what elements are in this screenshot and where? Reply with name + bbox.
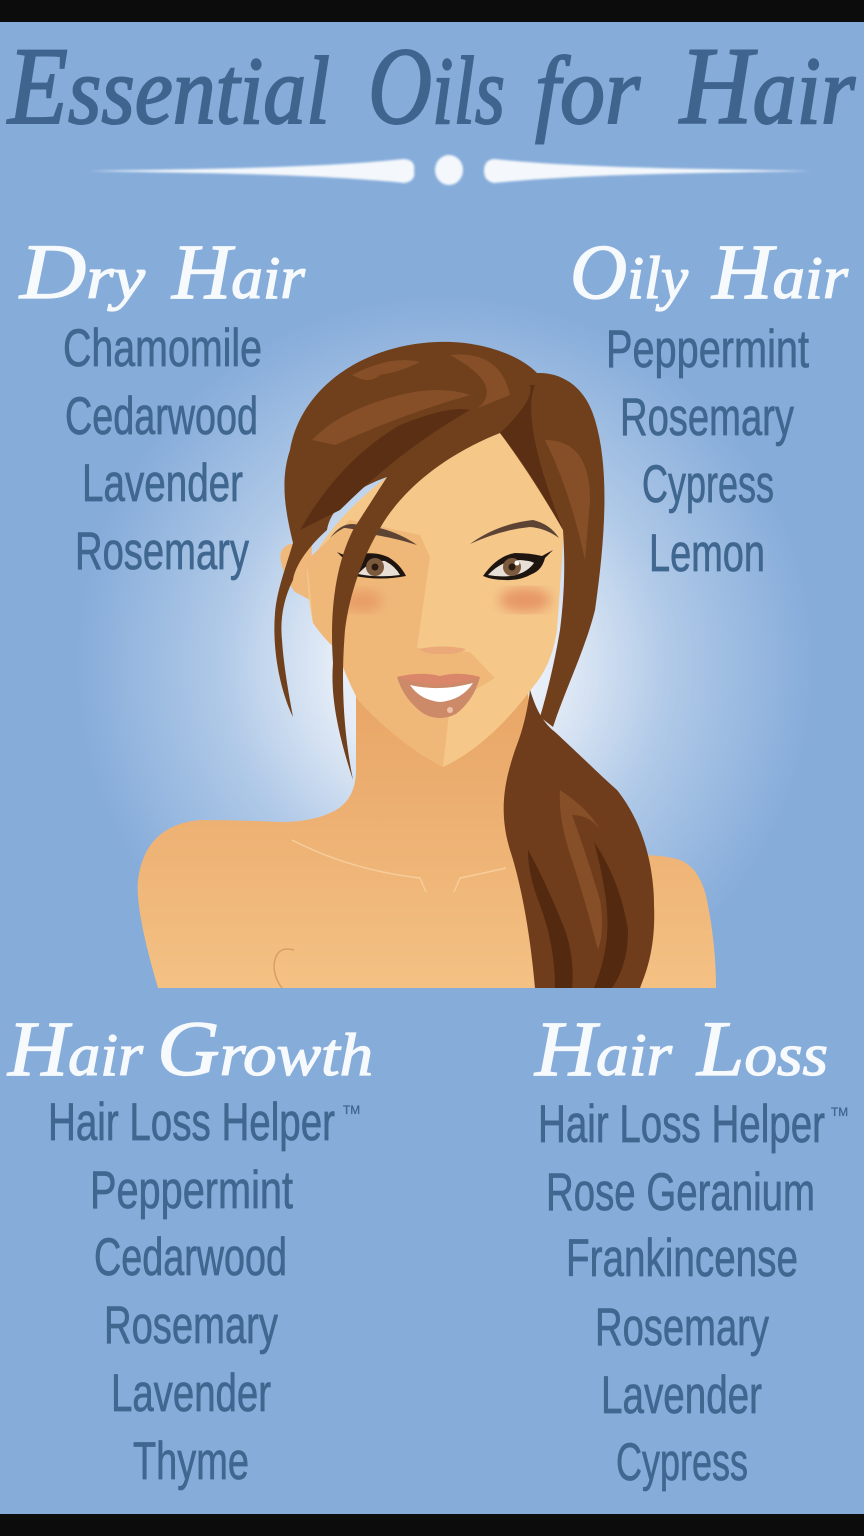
right eye	[483, 550, 553, 580]
oil list: hair growth: Rosemary	[104, 1296, 278, 1355]
oil list: dry hair: Chamomile	[63, 319, 262, 378]
heading: oily hair	[570, 228, 849, 315]
arm crease	[274, 949, 294, 988]
oil list: dry hair	[63, 319, 262, 581]
title: Oils	[368, 25, 505, 147]
ponytail	[504, 690, 654, 988]
title	[6, 25, 856, 147]
heading: hair growth: Growth	[157, 1005, 373, 1092]
face	[307, 433, 564, 767]
oil list: hair loss: Lavender	[601, 1366, 762, 1425]
heading: oily hair: Hair	[711, 228, 849, 315]
nose	[419, 646, 466, 654]
heading: dry hair: Dry	[19, 228, 145, 315]
oil list: hair loss: Cypress	[616, 1433, 748, 1492]
ponytail highlights	[560, 790, 602, 950]
mouth	[397, 674, 480, 718]
heading: oily hair: Oily	[570, 228, 688, 315]
face shading	[307, 520, 495, 767]
title: for	[535, 37, 641, 144]
title ornament	[88, 155, 812, 185]
heading: hair growth: Hair	[7, 1005, 144, 1092]
hair dark streaks	[300, 385, 563, 530]
panel: hair growth	[7, 1005, 373, 1491]
oil list: hair growth	[48, 1093, 360, 1491]
illustration: woman	[138, 342, 716, 988]
heading: hair growth	[7, 1005, 373, 1092]
oil list: hair loss: TM	[831, 1105, 848, 1119]
panel: hair loss	[534, 1005, 848, 1492]
heading: hair loss	[534, 1005, 828, 1092]
oil list: dry hair: Lavender	[82, 454, 243, 513]
oil list: hair growth: TM	[343, 1103, 360, 1117]
oil list: oily hair: Cypress	[642, 455, 774, 514]
oil list: hair growth: Cedarwood	[94, 1228, 287, 1287]
panel: oily hair	[570, 228, 849, 583]
heading: hair loss: Hair	[534, 1005, 673, 1092]
left eye	[337, 552, 406, 578]
panel: dry hair	[19, 228, 306, 581]
ponytail shading	[528, 842, 628, 988]
oil list: dry hair: Rosemary	[75, 522, 249, 581]
oil list: hair loss	[538, 1095, 848, 1492]
body and shoulders	[138, 690, 716, 988]
oil list: hair growth: Peppermint	[90, 1161, 293, 1220]
heading: dry hair	[19, 228, 306, 315]
oil list: dry hair: Cedarwood	[65, 387, 258, 446]
heading: hair loss: Loss	[696, 1005, 828, 1092]
background glow	[104, 324, 786, 888]
heading: dry hair: Hair	[171, 228, 306, 315]
oil list: hair growth: Lavender	[111, 1364, 271, 1423]
oil list: oily hair: Lemon	[649, 524, 765, 583]
oil list: hair growth: Thyme	[133, 1432, 249, 1491]
eyebrows	[330, 520, 559, 545]
collarbone lines	[292, 840, 506, 892]
oil list: hair growth: Hair Loss Helper	[48, 1093, 335, 1152]
hair	[274, 342, 604, 780]
title: Hair	[678, 25, 856, 147]
oil list: oily hair	[606, 320, 809, 583]
ear	[280, 544, 312, 600]
oil list: oily hair: Rosemary	[620, 388, 794, 447]
hair highlights	[312, 354, 590, 560]
blush	[342, 588, 551, 612]
title: Essential	[6, 25, 330, 147]
oil list: hair loss: Rosemary	[595, 1298, 769, 1357]
